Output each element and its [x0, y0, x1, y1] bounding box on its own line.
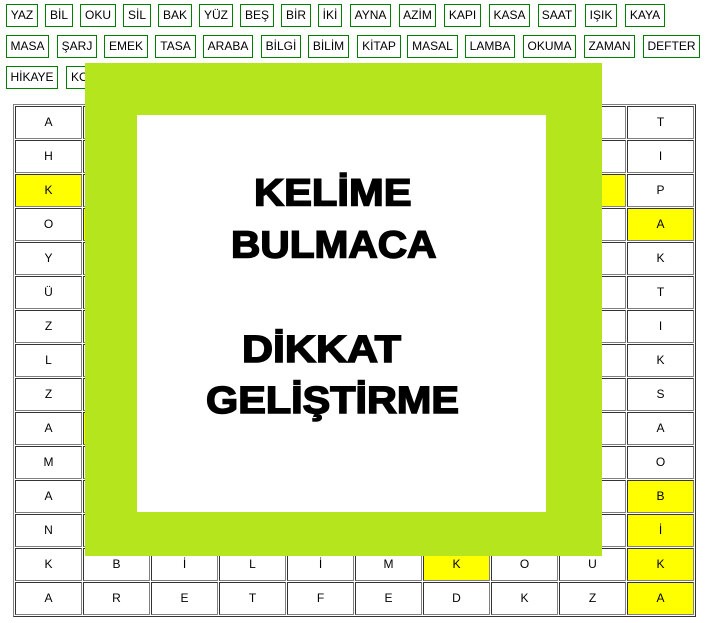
puzzle letter grid: R [112, 590, 121, 604]
puzzle letter grid: O [44, 216, 53, 230]
puzzle letter grid: K [520, 590, 528, 604]
puzzle letter grid: K [656, 352, 664, 366]
puzzle letter grid: L [45, 352, 52, 366]
puzzle letter grid: N [44, 522, 53, 536]
puzzle letter grid: K [656, 250, 664, 264]
puzzle letter grid: T [657, 114, 664, 128]
word row 2: TASA [160, 39, 191, 53]
puzzle letter grid: D [452, 590, 461, 604]
word row 3: HİKAYE [10, 70, 54, 84]
word row 2 [6, 35, 700, 58]
puzzle letter grid: K [44, 556, 52, 570]
puzzle letter grid: Z [589, 590, 596, 604]
puzzle letter grid: T [657, 284, 664, 298]
puzzle letter grid: B [112, 556, 120, 570]
puzzle letter grid: A [656, 590, 664, 604]
word row 1: BEŞ [245, 8, 269, 22]
puzzle letter grid: A [44, 420, 52, 434]
title overlay: green frame [85, 63, 602, 556]
puzzle letter grid: A [656, 420, 664, 434]
puzzle letter grid: T [249, 590, 256, 604]
word row 3: KO [71, 70, 88, 84]
word row 2: ŞARJ [62, 39, 92, 53]
title text [206, 172, 459, 422]
word row 1: KASA [493, 8, 526, 22]
puzzle letter grid: K [452, 556, 460, 570]
word row 2: ARABA [208, 39, 248, 53]
word row 1: SAAT [542, 8, 572, 22]
word row 1: YAZ [11, 8, 33, 22]
word row 2: BİLGİ [266, 39, 296, 53]
heading line: GELİŞTİRME: GELİŞTİRME [206, 380, 459, 422]
puzzle letter grid: K [44, 182, 52, 196]
puzzle letter grid: A [44, 114, 52, 128]
puzzle letter grid: İ [659, 522, 662, 536]
puzzle letter grid: K [656, 556, 664, 570]
word row 2: KİTAP [362, 39, 396, 53]
word row 1 [6, 4, 665, 27]
puzzle letter grid: Z [45, 318, 52, 332]
puzzle letter grid: İ [319, 556, 322, 570]
puzzle letter grid: S [656, 386, 664, 400]
puzzle letter grid: P [656, 182, 664, 196]
heading line: BULMACA: BULMACA [231, 224, 436, 266]
puzzle letter grid: E [180, 590, 188, 604]
puzzle letter grid: I [659, 148, 662, 162]
word row 3 [6, 66, 88, 89]
word row 1: İKİ [323, 8, 337, 22]
puzzle letter grid: I [659, 318, 662, 332]
puzzle letter grid [13, 104, 696, 617]
panel: white title card [137, 115, 546, 512]
puzzle letter grid: B [656, 488, 664, 502]
word row 1: YÜZ [204, 8, 228, 22]
puzzle letter grid: M [44, 454, 54, 468]
word row 1: SİL [128, 8, 146, 22]
word row 2: EMEK [109, 39, 143, 53]
puzzle letter grid: Z [45, 386, 52, 400]
word row 2: OKUMA [527, 39, 572, 53]
puzzle letter grid: E [384, 590, 392, 604]
word row 2: BİLİM [313, 39, 344, 53]
puzzle letter grid: A [656, 216, 664, 230]
word row 1: BAK [163, 8, 187, 22]
puzzle letter grid: O [656, 454, 665, 468]
word row 2: LAMBA [470, 39, 510, 53]
puzzle letter grid: A [44, 590, 52, 604]
word row 1: AZİM [403, 8, 432, 22]
word row 1: AYNA [355, 8, 386, 22]
word row 1: IŞIK [590, 8, 612, 22]
word row 2: DEFTER [648, 39, 696, 53]
heading line: KELİME: KELİME [254, 172, 412, 214]
word row 2: MASA [10, 39, 44, 53]
puzzle letter grid: F [317, 590, 324, 604]
word row 1: KAYA [630, 8, 660, 22]
puzzle letter grid: L [249, 556, 256, 570]
puzzle letter grid: M [384, 556, 394, 570]
puzzle letter grid: O [520, 556, 529, 570]
word row 2: ZAMAN [588, 39, 630, 53]
puzzle letter grid: Y [44, 250, 52, 264]
puzzle letter grid: A [44, 488, 52, 502]
puzzle letter grid: H [44, 148, 53, 162]
puzzle letter grid: U [588, 556, 597, 570]
word row 1: BİR [286, 8, 306, 22]
puzzle letter grid: Ü [44, 284, 53, 298]
heading line: DİKKAT: DİKKAT [242, 329, 401, 371]
word row 1: OKU [85, 8, 111, 22]
word row 1: KAPI [449, 8, 476, 22]
word row 2: MASAL [412, 39, 453, 53]
word bank [6, 4, 700, 89]
puzzle letter grid: İ [183, 556, 186, 570]
word row 1: BİL [50, 8, 68, 22]
